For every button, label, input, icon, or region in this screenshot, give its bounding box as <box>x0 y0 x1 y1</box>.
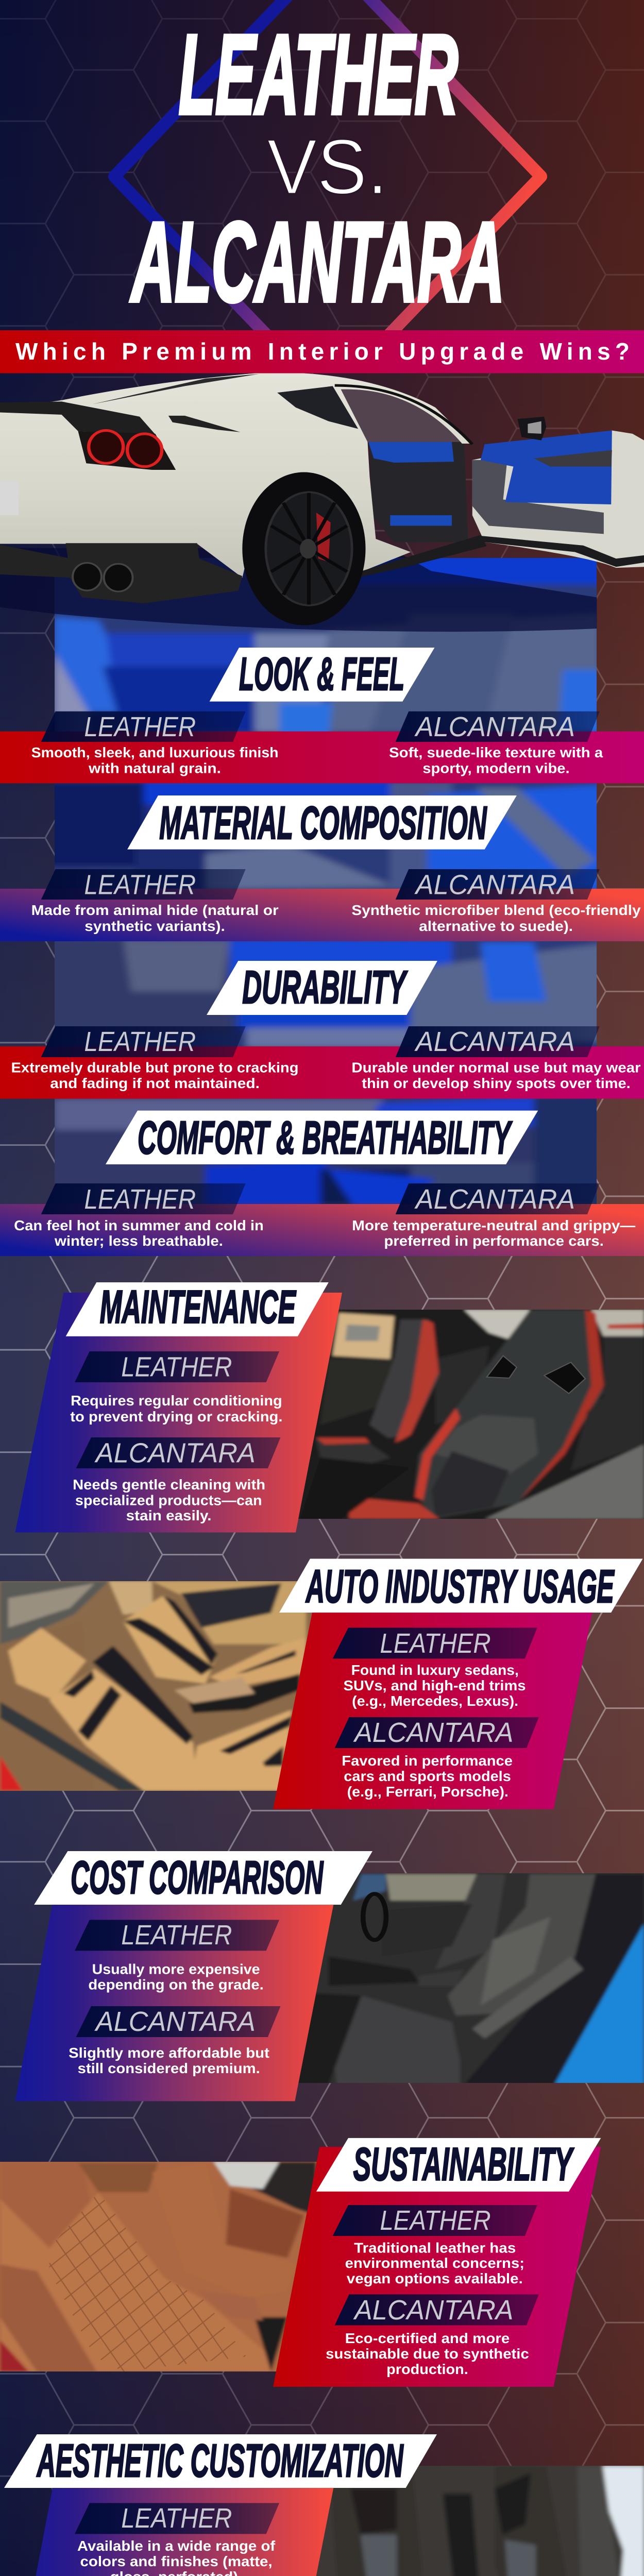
panel <box>15 2488 333 2576</box>
leather label <box>75 1351 279 1383</box>
leather text <box>88 1961 264 1993</box>
band <box>0 1046 644 1099</box>
photo: dark customized seats <box>316 2466 644 2576</box>
mirror <box>517 417 546 440</box>
section: cost comparison <box>15 1851 372 2101</box>
alcantara text: still considered premium. <box>78 2060 260 2076</box>
panel <box>15 1293 342 1532</box>
leather text: environmental concerns; <box>345 2255 524 2271</box>
leather label: LEATHER <box>84 711 196 742</box>
exhaust right <box>104 564 132 591</box>
alcantara label: ALCANTARA <box>94 1438 256 1469</box>
band <box>0 1204 644 1256</box>
heading <box>210 648 435 702</box>
panel <box>273 1613 592 1809</box>
section: sustainability <box>273 2138 601 2387</box>
alcantara text: stain easily. <box>126 1507 211 1523</box>
door inner <box>472 460 604 534</box>
leather text: Smooth, sleek, and luxurious finish <box>31 744 279 760</box>
leather text <box>70 1393 283 1425</box>
alcantara text: Synthetic microfiber blend (eco-friendly <box>351 902 641 918</box>
leather label <box>333 2205 537 2236</box>
alcantara text: specialized products—can <box>75 1493 262 1509</box>
car door <box>472 431 644 568</box>
heading: LOOK & FEEL <box>239 649 404 700</box>
heading: COST COMPARISON <box>71 1852 324 1904</box>
leather text: Extremely durable but prone to cracking <box>11 1060 299 1076</box>
alcantara label: ALCANTARA <box>414 1026 575 1057</box>
exhaust left <box>73 563 101 590</box>
roof edge <box>335 385 472 444</box>
alcantara label: ALCANTARA <box>353 2295 513 2326</box>
leather text <box>14 1217 264 1249</box>
heading <box>4 2434 437 2488</box>
leather label: LEATHER <box>84 1026 196 1057</box>
leather text: Requires regular conditioning <box>71 1393 282 1409</box>
leather text: winter; less breathable. <box>54 1233 223 1249</box>
leather text: Available in a wide range of <box>77 2538 276 2554</box>
quilting <box>49 2192 246 2371</box>
leather text: Usually more expensive <box>92 1961 260 1977</box>
blue seat backdrop photo <box>55 558 597 1204</box>
section: material composition <box>0 795 644 941</box>
subtitle banner <box>0 330 644 373</box>
leather label: LEATHER <box>380 1628 491 1659</box>
panel <box>273 2147 601 2387</box>
band <box>0 732 644 783</box>
rear quarter glass <box>277 386 358 429</box>
alcantara text: sporty, modern vibe. <box>422 760 570 776</box>
leather label: LEATHER <box>84 869 196 900</box>
leather text <box>77 2538 276 2576</box>
leather label: LEATHER <box>380 2205 491 2236</box>
alcantara text <box>73 1477 265 1523</box>
leather text <box>31 744 279 776</box>
alcantara label: ALCANTARA <box>414 869 575 900</box>
leather label: LEATHER <box>121 1352 232 1383</box>
door bottom edge <box>479 536 644 567</box>
leather text: with natural grain. <box>88 760 221 776</box>
leather label <box>41 711 246 742</box>
alcantara text: Favored in performance <box>342 1753 513 1769</box>
heading <box>207 961 437 1015</box>
side vent <box>168 416 240 432</box>
blue sill carpet <box>390 515 452 526</box>
alcantara text <box>352 1217 635 1249</box>
leather label <box>41 1026 246 1057</box>
car body <box>0 372 472 578</box>
steering wheel <box>363 1894 386 1940</box>
mirror glass <box>528 421 541 434</box>
panel <box>15 1905 333 2101</box>
alcantara text: sustainable due to synthetic <box>326 2346 529 2362</box>
alcantara text: alternative to suede). <box>419 918 573 934</box>
leather text: Found in luxury sedans, <box>351 1662 519 1678</box>
taillight left <box>89 431 123 463</box>
leather text: Traditional leather has <box>354 2240 516 2256</box>
leather label <box>75 2503 279 2534</box>
door grey inset <box>534 450 612 467</box>
alcantara label: ALCANTARA <box>414 711 575 742</box>
wheel rim <box>266 492 352 605</box>
blue door panel <box>481 431 612 504</box>
band <box>0 889 644 941</box>
wheel hub <box>300 539 316 558</box>
leather label: LEATHER <box>121 2503 232 2534</box>
leather text <box>31 902 279 934</box>
alcantara text: cars and sports models <box>344 1768 511 1784</box>
alcantara text <box>351 902 641 934</box>
license plate <box>0 481 19 515</box>
leather label: LEATHER <box>84 1184 196 1215</box>
leather text: Can feel hot in summer and cold in <box>14 1217 264 1233</box>
car photo <box>0 372 644 625</box>
leather text: depending on the grade. <box>88 1977 264 1993</box>
taillight right <box>127 434 162 467</box>
heading: MAINTENANCE <box>100 1282 297 1333</box>
photo: tan and black seats <box>0 1581 312 1791</box>
wheel spokes <box>271 493 347 605</box>
spoiler <box>0 401 155 434</box>
leather text: to prevent drying or cracking. <box>70 1409 283 1425</box>
leather label <box>75 1920 279 1951</box>
alcantara text: thin or develop shiny spots over time. <box>362 1075 631 1091</box>
leather text: Made from animal hide (natural or <box>31 902 279 918</box>
alcantara text <box>389 744 603 776</box>
alcantara text: production. <box>386 2361 468 2377</box>
alcantara text: (e.g., Ferrari, Porsche). <box>347 1784 509 1800</box>
subtitle banner: Which Premium Interior Upgrade Wins? <box>15 338 630 365</box>
leather label <box>333 1628 537 1659</box>
leather text: colors and finishes (matte, <box>80 2553 273 2569</box>
leather text <box>11 1060 299 1091</box>
section: aesthetic customization <box>4 2434 437 2576</box>
leather text <box>345 2240 524 2286</box>
alcantara label: ALCANTARA <box>353 1717 513 1748</box>
photo: grey alcantara seats with blue car <box>299 1873 644 2083</box>
leather label: LEATHER <box>121 1920 232 1951</box>
alcantara text: Eco-certified and more <box>345 2330 510 2346</box>
interior dark <box>369 440 468 542</box>
leather text: and fading if not maintained. <box>50 1075 260 1091</box>
headrest openings <box>487 1355 585 1394</box>
section: maintenance <box>15 1282 342 1532</box>
leather text: (e.g., Mercedes, Lexus). <box>352 1693 518 1709</box>
leather text: synthetic variants). <box>84 918 225 934</box>
title <box>130 12 504 325</box>
alcantara text: Soft, suede-like texture with a <box>389 744 603 760</box>
section: durability <box>0 961 644 1099</box>
alcantara text <box>351 1060 641 1091</box>
leather label <box>41 1183 246 1215</box>
alcantara text <box>326 2330 529 2377</box>
blue dash <box>368 442 454 463</box>
heading <box>66 1282 329 1336</box>
section: auto industry usage <box>273 1559 643 1809</box>
photo: brown quilted seats <box>0 2162 317 2371</box>
brake caliper <box>316 513 331 562</box>
alcantara text: Needs gentle cleaning with <box>73 1477 265 1493</box>
section: comfort and breathability <box>0 1111 644 1256</box>
alcantara text: Slightly more affordable but <box>69 2045 269 2061</box>
diamond outline <box>108 0 547 330</box>
section: look and feel <box>0 648 644 783</box>
alcantara text: More temperature-neutral and grippy— <box>352 1217 635 1233</box>
alcantara text: Durable under normal use but may wear <box>351 1060 641 1076</box>
heading: DURABILITY <box>242 962 408 1013</box>
photo: black and red seats <box>287 1303 644 1527</box>
alcantara text: preferred in performance cars. <box>384 1233 604 1249</box>
car shadow <box>0 548 597 632</box>
wheel tyre <box>242 472 366 625</box>
roof stripe <box>92 374 259 404</box>
leather text: vegan options available. <box>347 2270 523 2286</box>
title: VS. <box>267 123 388 211</box>
alcantara text <box>69 2045 269 2076</box>
leather label <box>41 869 246 900</box>
leather text: SUVs, and high-end trims <box>343 1677 526 1693</box>
rear bumper carbon <box>0 543 242 603</box>
alcantara text <box>342 1753 513 1800</box>
taillight housing <box>78 431 176 470</box>
window glass <box>341 389 462 442</box>
heading <box>34 1851 372 1905</box>
side sill <box>362 535 487 577</box>
alcantara label: ALCANTARA <box>414 1184 575 1215</box>
leather text <box>343 1662 526 1709</box>
heading <box>127 795 517 850</box>
alcantara label: ALCANTARA <box>94 2006 256 2037</box>
